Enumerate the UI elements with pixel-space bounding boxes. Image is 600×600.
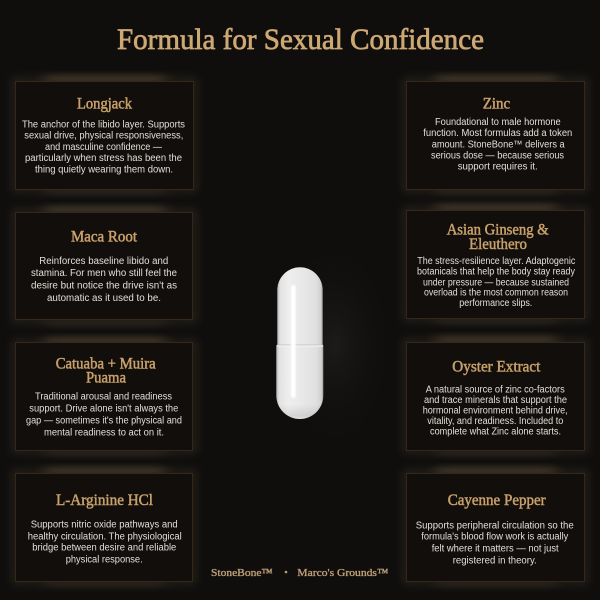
panel: Longjack: [15, 76, 194, 194]
text: L-Arginine description: physical response.: [66, 555, 143, 566]
text: Zinc description: support requires it.: [458, 162, 538, 173]
text: Ginseng description: overload is the most common reason: [424, 288, 568, 298]
text: Longjack description: thing quietly wearing them down.: [35, 164, 173, 175]
text: Ginseng description: performance slips.: [459, 298, 532, 309]
footer brand line: StoneBone™: [211, 567, 273, 579]
panel: Cayenne Pepper: [406, 468, 585, 586]
text: Zinc description: serious dose — because serious: [431, 151, 564, 162]
footer brand line: Marco's Grounds™: [297, 567, 389, 579]
heading: Maca Root: Maca Root: [71, 229, 138, 246]
text: Oyster description: hormonal environment behind drive,: [423, 406, 568, 417]
panel: Oyster Extract: [406, 337, 585, 455]
text: Longjack description: particularly when stress has been the: [25, 153, 182, 164]
text: Longjack description: sexual drive, physical responsiveness,: [24, 131, 183, 142]
heading: Cayenne Pepper: Cayenne Pepper: [448, 492, 546, 509]
heading: Asian Ginseng & Eleuthero: Eleuthero: [469, 236, 527, 253]
text: Oyster description: and trace minerals that support the: [424, 395, 567, 406]
heading: Asian Ginseng & Eleuthero: [447, 221, 549, 253]
text: Maca Root description: Reinforces baseline libido and: [39, 256, 168, 267]
text: Ginseng description: botanicals that help the body stay ready: [417, 267, 575, 278]
text: L-Arginine description: Supports nitric oxide pathways and: [31, 519, 178, 530]
text: Ginseng description: under pressure — because sustained: [423, 277, 569, 288]
text: Maca Root description: automatic as it used to be.: [47, 293, 161, 304]
text: Catuaba description: mental readiness to act on it.: [44, 427, 164, 438]
heading: Asian Ginseng & Eleuthero: Asian Ginseng &: [447, 221, 549, 238]
text: Oyster description: complete what Zinc alone starts.: [430, 427, 561, 438]
panel: Zinc: [406, 76, 585, 194]
icon: white capsule: [275, 235, 395, 455]
text: Maca Root description: stamina. For men who still feel the: [31, 268, 177, 279]
panel: Maca Root: [15, 207, 194, 325]
heading: Catuaba + Muira Puama: Puama: [86, 369, 126, 386]
panel: Asian Ginseng & Eleuthero: [406, 205, 585, 323]
text: Cayenne description: [416, 520, 574, 567]
panel: Catuaba + Muira Puama: [15, 338, 194, 455]
heading: Oyster Extract: Oyster Extract: [452, 359, 541, 376]
text: Zinc description: amount. StoneBone™ delivers a: [432, 140, 565, 150]
text: L-Arginine description: [28, 519, 182, 566]
text: Oyster description: A natural source of zinc co-factors: [426, 385, 565, 396]
text: Zinc description: function. Most formulas add a token: [423, 128, 572, 139]
footer brand line: [211, 567, 389, 579]
text: Cayenne description: registered in theory.: [453, 556, 537, 567]
text: L-Arginine description: bridge between desire and reliable: [32, 543, 177, 554]
panel: L-Arginine HCl: [15, 468, 193, 586]
heading: L-Arginine HCl: L-Arginine HCl: [56, 492, 153, 509]
text: Catuaba description: gap — sometimes it's the physical and: [26, 416, 182, 427]
text: Catuaba description: [26, 391, 182, 438]
heading: Longjack: Longjack: [77, 96, 132, 112]
text: Catuaba description: Traditional arousal and readiness: [35, 391, 172, 402]
text: Longjack description: [22, 120, 185, 175]
text: Maca Root description: [31, 256, 177, 304]
text: Oyster description: [423, 385, 568, 438]
heading: Zinc: Zinc: [483, 96, 510, 112]
text: Longjack description: The anchor of the libido layer. Supports: [22, 120, 185, 131]
text: L-Arginine description: healthy circulation. The physiological: [28, 531, 182, 542]
text: Longjack description: and masculine confidence —: [45, 142, 162, 153]
text: Oyster description: vitality, and readiness. Included to: [427, 416, 564, 427]
text: Cayenne description: felt where it matters — not just: [432, 544, 559, 555]
text: Zinc description: Foundational to male hormone: [435, 117, 561, 128]
text: Ginseng description: The stress-resilience layer. Adaptogenic: [417, 256, 575, 267]
text: Ginseng description: [417, 256, 575, 309]
text: Zinc description: [423, 117, 572, 173]
text: Maca Root description: desire but notice the drive isn't as: [31, 281, 177, 292]
heading: Catuaba + Muira Puama: [56, 355, 156, 386]
text: Cayenne description: formula's blood flow work is actually: [421, 532, 568, 543]
text: Catuaba description: support. Drive alone isn't always the: [29, 403, 179, 414]
title: Formula for Sexual Confidence: [117, 24, 484, 56]
text: Cayenne description: Supports peripheral circulation so the: [416, 520, 574, 531]
heading: Catuaba + Muira Puama: Catuaba + Muira: [56, 355, 156, 372]
